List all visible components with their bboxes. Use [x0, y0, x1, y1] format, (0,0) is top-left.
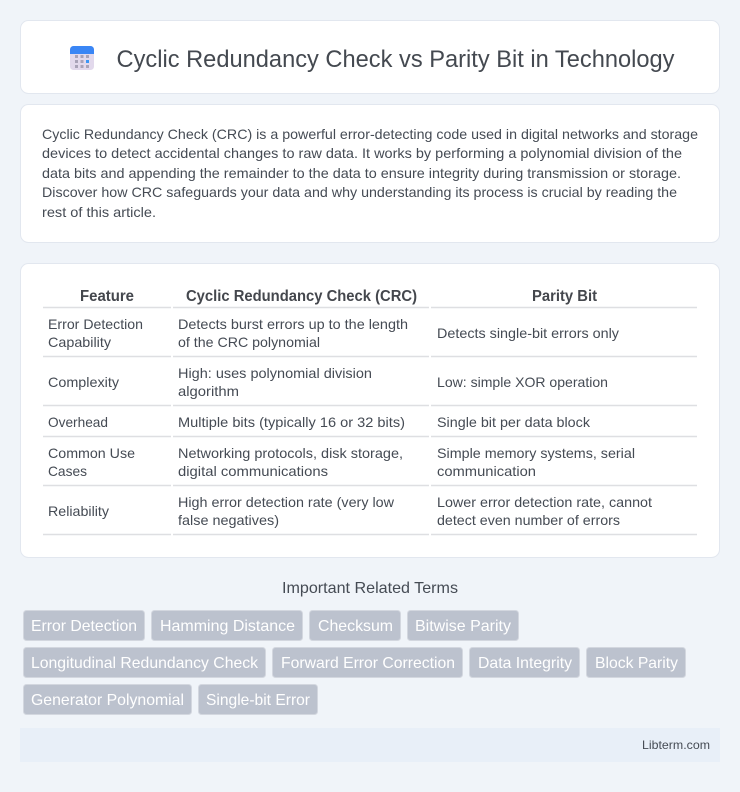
table row: complexity: Complexity	[48, 374, 119, 390]
icon: calendar grid	[70, 46, 94, 70]
tag: generator polynomial	[24, 684, 192, 714]
table row: error detection capability: Error Detection	[48, 316, 143, 332]
table row: common use cases: digital communications	[178, 463, 328, 479]
panel: introduction	[20, 104, 720, 242]
table row: overhead: Single bit per data block	[437, 414, 591, 430]
table row: reliability: Reliability	[48, 503, 109, 519]
table row: common use cases: Simple memory systems, serial	[437, 445, 635, 461]
panel: comparison table	[20, 264, 720, 558]
table row: error detection capability: of the CRC polynomial	[178, 334, 320, 350]
tag: block parity: Block Parity	[595, 655, 678, 672]
table row: common use cases: Common Use	[48, 445, 135, 461]
table row: error detection capability: Detects single-bit errors only	[437, 325, 619, 341]
tag: checksum	[310, 610, 400, 640]
table row: common use cases: communication	[437, 463, 536, 479]
tag: forward error correction	[272, 648, 462, 678]
table row: common use cases	[48, 445, 635, 479]
tag: error detection	[24, 610, 144, 640]
text block: introduction paragraph: devices to detect accidental changes to raw data. It works by performing a polynomial division of the	[42, 145, 682, 161]
table row: complexity: algorithm	[178, 383, 239, 399]
table row: complexity	[48, 365, 608, 399]
table row: complexity: Low: simple XOR operation	[437, 374, 608, 390]
table row: error detection capability	[48, 316, 619, 350]
text block: introduction paragraph: Cyclic Redundancy Check (CRC) is a powerful error-detecting code used in digital networks and storage	[42, 126, 698, 142]
text block: introduction paragraph	[42, 126, 698, 220]
text block: introduction paragraph: data bits and appending the remainder to the data to ensure integrity during transmission or storage.	[42, 165, 681, 181]
title: Cyclic Redundancy Check vs Parity Bit in Technology	[116, 46, 675, 73]
tag: generator polynomial: Generator Polynomial	[31, 692, 184, 709]
text block: introduction paragraph: Discover how CRC safeguards your data and why understanding its process is crucial by reading the	[42, 184, 677, 200]
tag: single-bit error: Single-bit Error	[206, 692, 311, 709]
tag: error detection: Error Detection	[31, 618, 137, 635]
text block: introduction paragraph: rest of this article.	[42, 204, 156, 220]
table row: reliability: detect even number of errors	[437, 512, 620, 528]
tag: hamming distance	[152, 610, 302, 640]
table row: reliability: false negatives)	[178, 512, 279, 528]
footer bar	[20, 728, 720, 762]
table row: error detection capability: Detects burst errors up to the length	[178, 316, 408, 332]
tag: data integrity: Data Integrity	[478, 655, 572, 672]
table row: reliability: High error detection rate (very low	[178, 494, 395, 510]
tag: forward error correction: Forward Error Correction	[281, 655, 455, 672]
table row: common use cases: Cases	[48, 463, 87, 479]
table row: reliability	[48, 494, 652, 528]
table row: reliability: Lower error detection rate, cannot	[437, 494, 652, 510]
panel: related term tags	[24, 610, 686, 714]
table header row	[80, 288, 598, 305]
table row: common use cases: Networking protocols, disk storage,	[178, 445, 403, 461]
table row: complexity: High: uses polynomial division	[178, 365, 372, 381]
tag: hamming distance: Hamming Distance	[160, 618, 295, 635]
tag: longitudinal redundancy check: Longitudinal Redundancy Check	[31, 655, 259, 672]
table row: overhead: Multiple bits (typically 16 or 32 bits)	[178, 414, 405, 430]
panel: header	[20, 20, 720, 94]
tag: single-bit error	[198, 684, 318, 714]
table row: overhead	[48, 414, 591, 430]
table row: overhead: Overhead	[48, 414, 108, 430]
table row: error detection capability: Capability	[48, 334, 111, 350]
tag: bitwise parity: Bitwise Parity	[415, 618, 511, 635]
table header row: Feature	[80, 288, 134, 305]
tag: bitwise parity	[408, 610, 518, 640]
footer text: source: Libterm.com	[642, 738, 710, 752]
table header row: Parity Bit	[532, 288, 598, 305]
tag: block parity	[586, 648, 686, 678]
heading: important related terms: Important Related Terms	[282, 580, 458, 597]
tag: checksum: Checksum	[318, 618, 393, 635]
tag: longitudinal redundancy check	[24, 648, 266, 678]
tag: data integrity	[470, 648, 580, 678]
table header row: Cyclic Redundancy Check (CRC)	[186, 288, 417, 305]
